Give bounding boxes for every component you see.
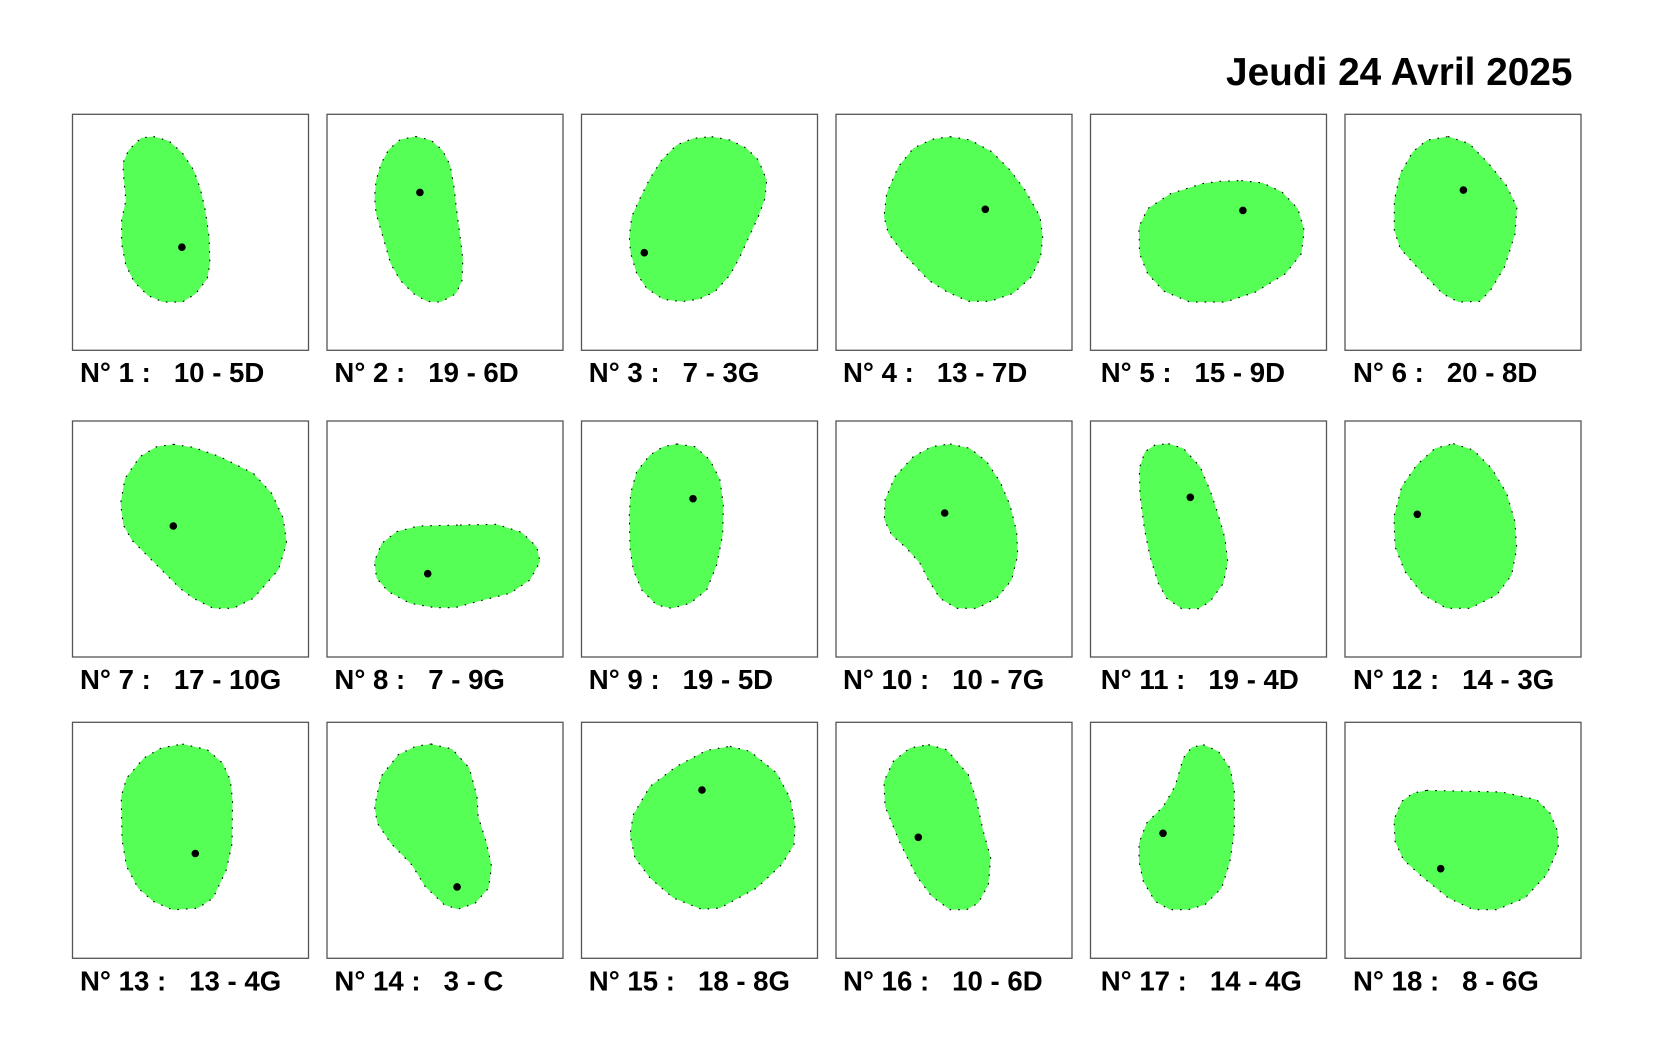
label: N° 6 : 20 - 8D: [1353, 357, 1537, 388]
panel: N° 17: [1090, 722, 1326, 996]
label: N° 7 : 17 - 10G: [80, 664, 281, 695]
dot: [982, 206, 989, 213]
green blob: [122, 137, 210, 302]
green blob: [375, 137, 463, 302]
box: [327, 114, 563, 350]
green blob: [629, 137, 767, 302]
box: [1345, 114, 1581, 350]
dot: [424, 570, 432, 578]
box: [1345, 421, 1581, 657]
panel: N° 18: [1345, 722, 1581, 996]
dot: [1414, 510, 1421, 518]
label: N° 5 : 15 - 9D: [1101, 357, 1285, 388]
label: N° 17 : 14 - 4G: [1101, 965, 1302, 996]
box: [582, 114, 818, 350]
green blob: [1394, 137, 1517, 302]
label: N° 3 : 7 - 3G: [589, 357, 759, 388]
box: [582, 421, 818, 657]
label: N° 10 : 10 - 7G: [843, 664, 1044, 695]
panel: N° 15: [582, 722, 818, 996]
dot: [1186, 494, 1194, 501]
green blob: [884, 745, 991, 910]
box: [1090, 722, 1326, 958]
panel: N° 6: [1345, 114, 1581, 388]
panel: N° 16: [836, 722, 1072, 996]
dot: [1460, 186, 1467, 194]
label: N° 2 : 19 - 6D: [334, 357, 519, 388]
green blob: [629, 444, 723, 608]
dot: [698, 786, 706, 794]
dot: [689, 495, 697, 503]
box: [72, 722, 308, 958]
panel: N° 3: [582, 114, 818, 388]
box: [1090, 114, 1326, 350]
label: N° 12 : 14 - 3G: [1353, 664, 1554, 695]
dot: [416, 189, 424, 196]
green blob: [1394, 444, 1517, 608]
panel: N° 9: [582, 421, 818, 695]
green blob: [374, 524, 540, 608]
box: [327, 421, 563, 657]
panel: N° 14: [327, 722, 563, 996]
dot: [1239, 207, 1247, 214]
dot: [192, 850, 199, 857]
panel: N° 11: [1090, 421, 1326, 695]
green blob: [884, 137, 1043, 301]
box: [72, 421, 308, 657]
box: [1345, 722, 1581, 958]
label: N° 18 : 8 - 6G: [1353, 965, 1539, 996]
label: N° 16 : 10 - 6D: [843, 965, 1043, 996]
green blob: [1139, 444, 1228, 609]
box: [327, 722, 563, 958]
panel: N° 10: [836, 421, 1072, 695]
dot: [1437, 865, 1444, 872]
panel: N° 2: [327, 114, 563, 388]
label: N° 13 : 13 - 4G: [80, 965, 281, 996]
green blob: [884, 444, 1018, 608]
label: N° 14 : 3 - C: [334, 965, 503, 996]
box: [836, 421, 1072, 657]
label: N° 11 : 19 - 4D: [1101, 664, 1299, 695]
label: N° 9 : 19 - 5D: [589, 664, 773, 695]
box: [836, 722, 1072, 958]
panel: N° 4: [836, 114, 1072, 388]
green blob: [121, 444, 287, 608]
dot: [1159, 830, 1167, 837]
dot: [170, 522, 177, 530]
box: [582, 722, 818, 958]
panel: N° 5: [1090, 114, 1326, 388]
panel: N° 1: [72, 114, 308, 388]
dot: [178, 243, 186, 251]
green blob: [1139, 181, 1304, 302]
label: N° 8 : 7 - 9G: [334, 664, 505, 695]
label: N° 4 : 13 - 7D: [843, 357, 1027, 388]
dot: [914, 834, 922, 841]
green blob: [1394, 790, 1558, 910]
panel: N° 12: [1345, 421, 1581, 695]
label: N° 1 : 10 - 5D: [80, 357, 264, 388]
green blob: [121, 744, 233, 910]
green blob: [630, 746, 795, 909]
dot: [453, 883, 461, 891]
panel: N° 8: [327, 421, 563, 695]
dot: [941, 509, 948, 517]
panel: N° 7: [72, 421, 308, 695]
box: [72, 114, 308, 350]
label: N° 15 : 18 - 8G: [589, 965, 790, 996]
green blob: [1139, 745, 1234, 910]
green blob: [375, 744, 492, 909]
panel: N° 13: [72, 722, 308, 996]
dot: [640, 249, 648, 256]
box: [836, 114, 1072, 350]
box: [1090, 421, 1326, 657]
title: Jeudi 24 Avril 2025: [1226, 51, 1573, 94]
